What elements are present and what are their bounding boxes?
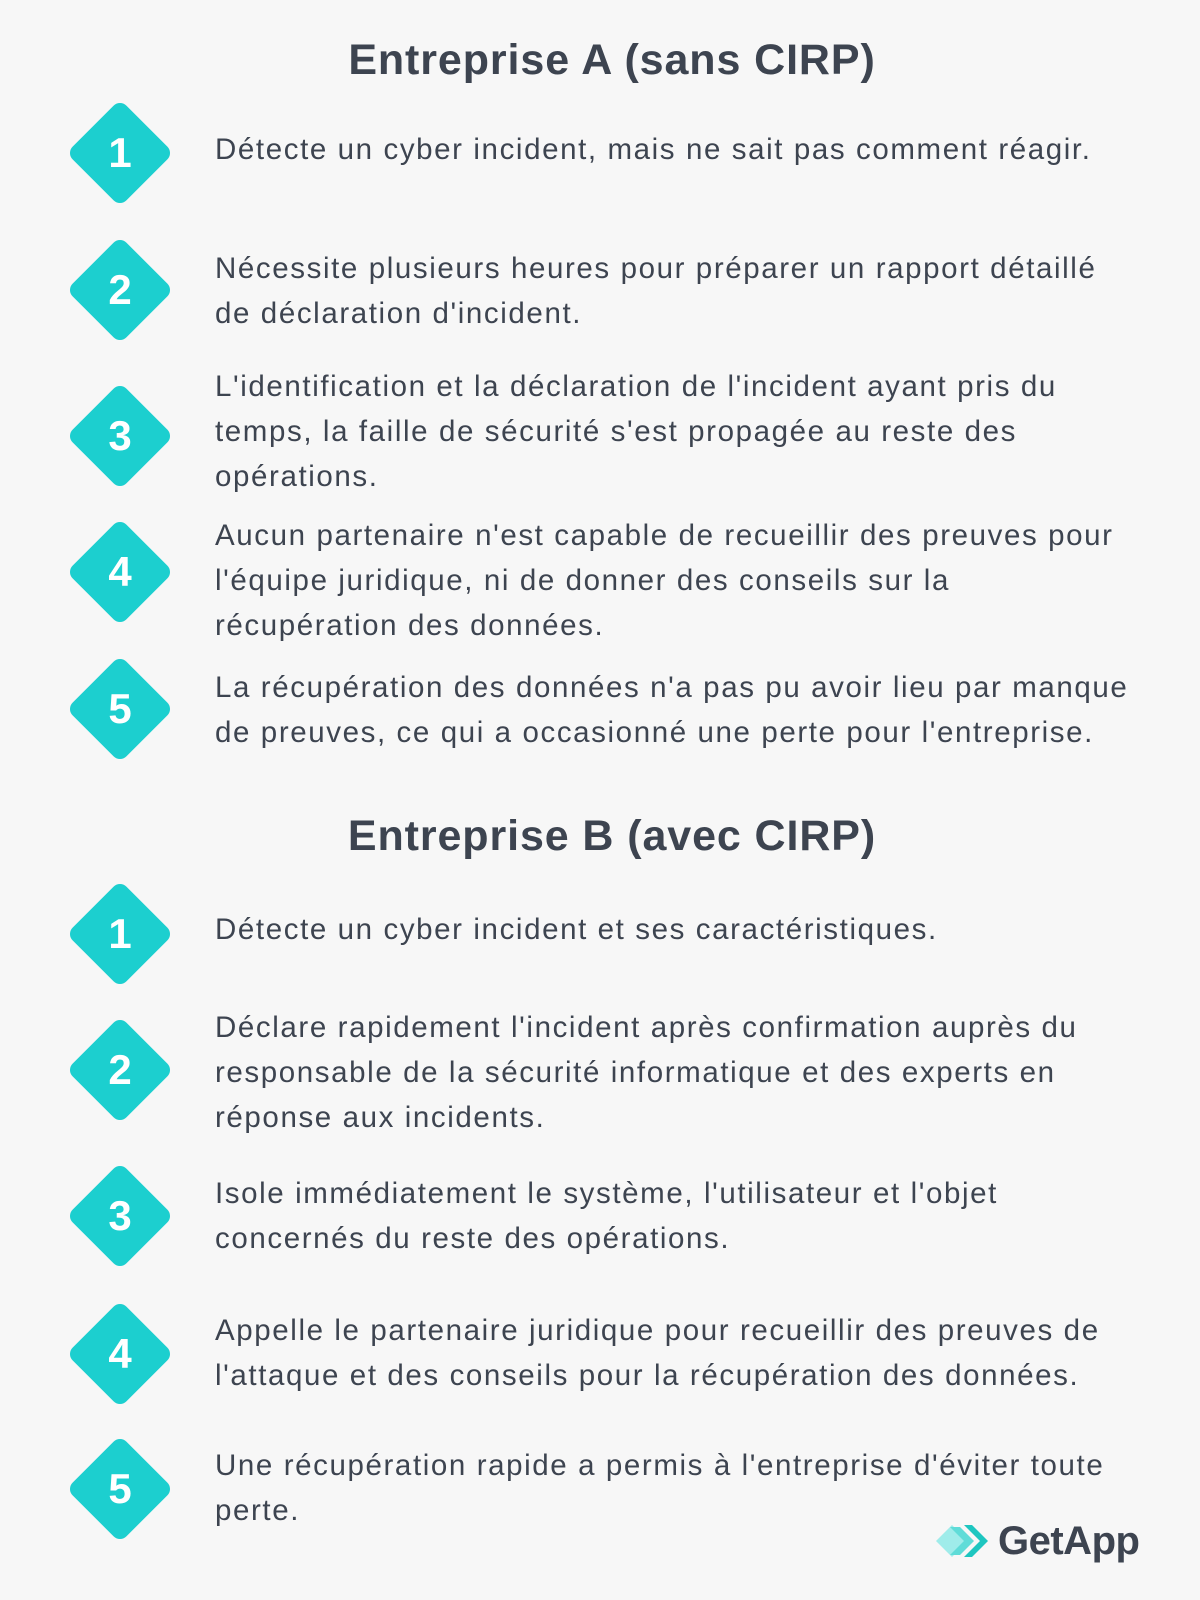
text: A3: temps, la faille de sécurité s'est propagée au reste des	[215, 415, 1017, 448]
text: A1: Détecte un cyber incident, mais ne sait pas comment réagir.	[215, 133, 1092, 166]
text: A4: Aucun partenaire n'est capable de recueillir des preuves pour	[215, 519, 1114, 552]
text: A3	[215, 370, 1057, 493]
icon: step A3	[70, 386, 170, 486]
icon: step A2	[70, 240, 170, 340]
text: A2: de déclaration d'incident.	[215, 297, 582, 330]
icon: step B2	[70, 1020, 170, 1120]
icon: step A5: 5	[108, 685, 132, 732]
text: A4: récupération des données.	[215, 609, 604, 642]
logo: GetApp	[936, 1519, 1139, 1563]
text: A3: L'identification et la déclaration de l'incident ayant pris du	[215, 370, 1057, 403]
text: B5: Une récupération rapide a permis à l'entreprise d'éviter toute	[215, 1449, 1104, 1482]
icon: step B3	[70, 1166, 170, 1266]
text: B1: Détecte un cyber incident et ses caractéristiques.	[215, 913, 938, 946]
icon: step B5: 5	[108, 1465, 132, 1512]
logo: GetApp: GetApp	[998, 1519, 1139, 1563]
text: B2: réponse aux incidents.	[215, 1101, 545, 1134]
icon: step B5	[70, 1439, 170, 1539]
text: A4: l'équipe juridique, ni de donner des conseils sur la	[215, 564, 950, 597]
icon: step A1	[70, 103, 170, 203]
text: B2: responsable de la sécurité informatique et des experts en	[215, 1056, 1056, 1089]
text: B2: Déclare rapidement l'incident après confirmation auprès du	[215, 1011, 1078, 1044]
text: A4	[215, 519, 1114, 642]
icon: step B1: 1	[108, 910, 132, 957]
icon: step A3: 3	[108, 412, 132, 459]
text: A5: La récupération des données n'a pas pu avoir lieu par manque	[215, 671, 1128, 704]
title: Entreprise B: Entreprise B (avec CIRP)	[348, 812, 876, 860]
title: Entreprise A: Entreprise A (sans CIRP)	[348, 36, 876, 84]
icon: step A4: 4	[108, 548, 132, 595]
text: B2	[215, 1011, 1078, 1134]
text: B5: perte.	[215, 1494, 300, 1527]
text: A3: opérations.	[215, 460, 379, 493]
text: A2	[215, 252, 1096, 330]
icon: step B3: 3	[108, 1192, 132, 1239]
text: B5	[215, 1449, 1104, 1527]
text: B4: Appelle le partenaire juridique pour recueillir des preuves de	[215, 1314, 1100, 1347]
icon: step A2: 2	[108, 266, 132, 313]
text: B4	[215, 1314, 1100, 1392]
icon: step B2: 2	[108, 1046, 132, 1093]
text: B3: concernés du reste des opérations.	[215, 1222, 730, 1255]
icon: step A5	[70, 659, 170, 759]
text: A5	[215, 671, 1128, 749]
text: A5: de preuves, ce qui a occasionné une perte pour l'entreprise.	[215, 716, 1094, 749]
icon: step B4: 4	[108, 1330, 132, 1377]
icon: step A1: 1	[108, 129, 132, 176]
icon: step B4	[70, 1304, 170, 1404]
text: A2: Nécessite plusieurs heures pour préparer un rapport détaillé	[215, 252, 1096, 285]
text: B4: l'attaque et des conseils pour la récupération des données.	[215, 1359, 1079, 1392]
text: B3: Isole immédiatement le système, l'utilisateur et l'objet	[215, 1177, 998, 1210]
icon: step B1	[70, 884, 170, 984]
text: B3	[215, 1177, 998, 1255]
icon: step A4	[70, 522, 170, 622]
